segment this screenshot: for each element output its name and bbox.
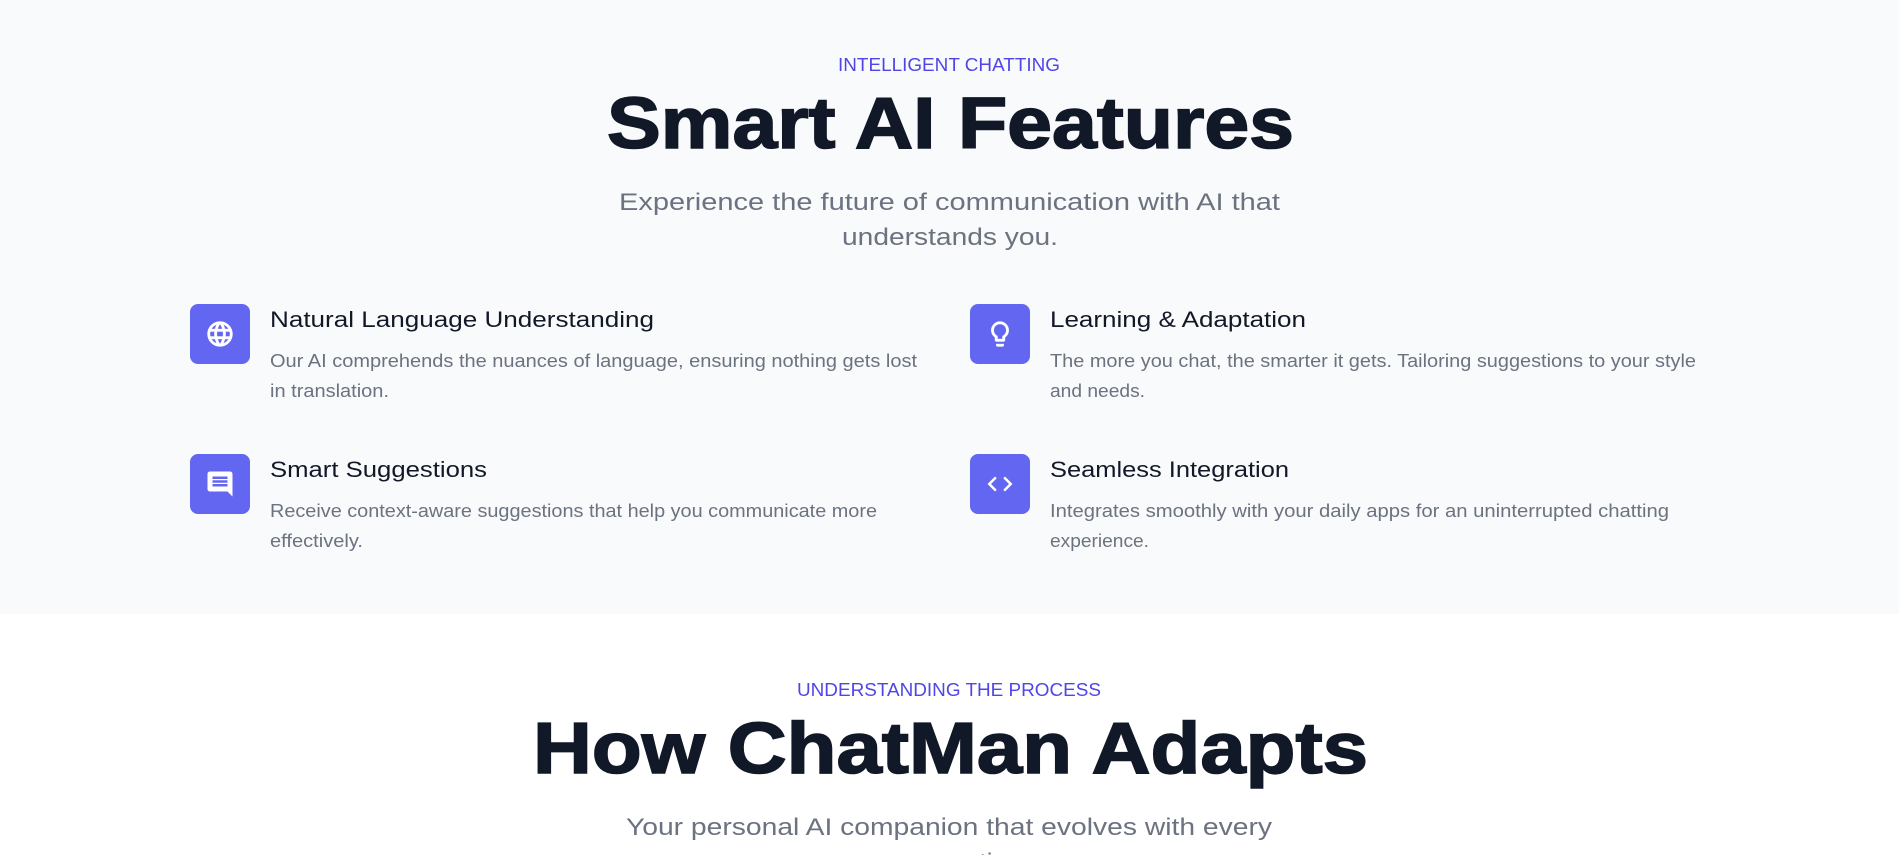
feature title: Natural Language Understanding xyxy=(270,307,654,332)
feature: smart suggestions xyxy=(190,454,877,551)
feature description: The more you chat, the smarter it gets. Tailoring suggestions to your style xyxy=(1050,351,1696,371)
feature title: Smart Suggestions xyxy=(270,457,487,482)
subtitle: features intro: understands you. xyxy=(842,224,1058,251)
heading: How ChatMan Adapts: How ChatMan Adapts xyxy=(533,709,1368,789)
eyebrow: intelligent chatting: INTELLIGENT CHATTING xyxy=(838,55,1060,75)
feature description: Integrates smoothly with your daily apps for an uninterrupted chatting xyxy=(1050,501,1669,521)
feature description xyxy=(1050,351,1696,401)
subtitle: features intro: Experience the future of communication with AI that xyxy=(619,189,1280,216)
feature title: Learning & Adaptation xyxy=(1050,307,1306,332)
feature description xyxy=(270,501,877,551)
feature description: Our AI comprehends the nuances of language, ensuring nothing gets lost xyxy=(270,351,917,371)
feature: natural language understanding xyxy=(190,304,917,401)
feature description: experience. xyxy=(1050,531,1149,551)
subtitle: features intro xyxy=(619,189,1280,251)
feature description: and needs. xyxy=(1050,381,1145,401)
feature: learning and adaptation xyxy=(970,304,1696,401)
icon: globe xyxy=(190,304,250,364)
feature title: Seamless Integration xyxy=(1050,457,1289,482)
feature description: Receive context-aware suggestions that help you communicate more xyxy=(270,501,877,521)
feature description xyxy=(270,351,917,401)
feature description: in translation. xyxy=(270,381,389,401)
panel: how ChatMan adapts section xyxy=(0,614,1899,855)
feature: seamless integration xyxy=(970,454,1669,551)
heading: Smart AI Features: Smart AI Features xyxy=(607,84,1294,164)
feature description xyxy=(1050,501,1669,551)
icon: code brackets xyxy=(970,454,1030,514)
panel: smart AI features section xyxy=(0,0,1899,614)
eyebrow: understanding the process: UNDERSTANDING THE PROCESS xyxy=(797,680,1101,700)
subtitle: process intro: Your personal AI companion that evolves with every xyxy=(626,814,1272,841)
subtitle: process intro xyxy=(626,814,1272,855)
feature description: effectively. xyxy=(270,531,363,551)
icon: chat bubble xyxy=(190,454,250,514)
icon: lightbulb xyxy=(970,304,1030,364)
